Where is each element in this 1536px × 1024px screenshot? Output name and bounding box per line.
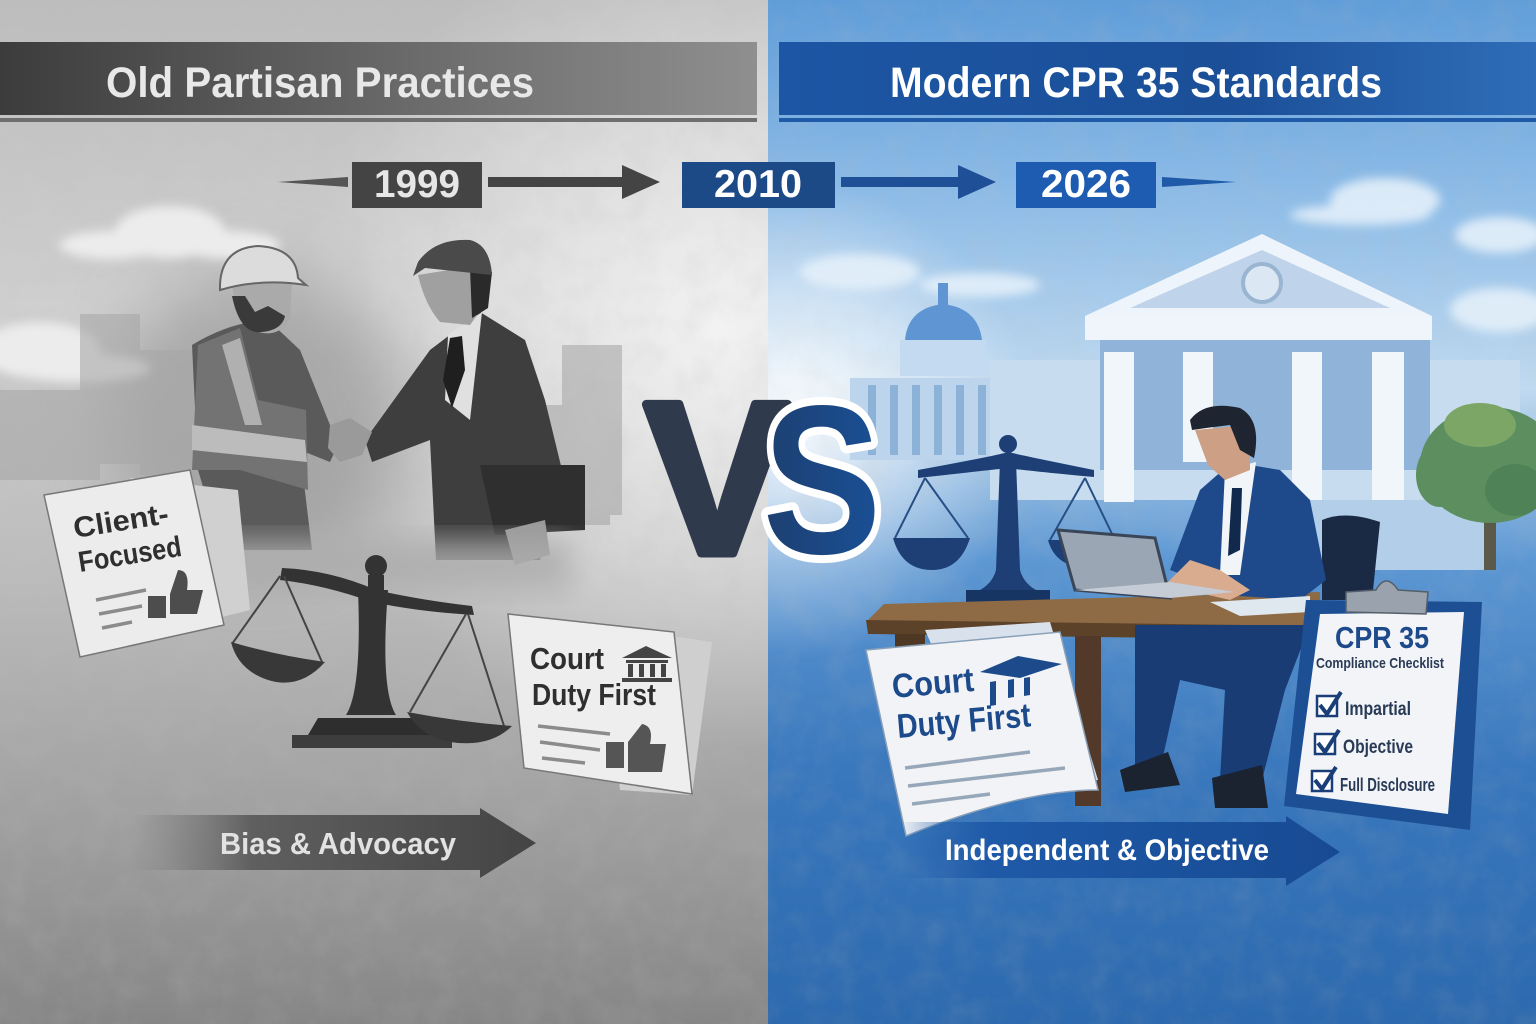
- clipboard: CPR 35 compliance checklist: CPR 35: [1335, 620, 1429, 655]
- tree: [1416, 403, 1536, 570]
- heading banner: modern CPR 35 standards: [779, 42, 1536, 122]
- year 1999: 1999: [374, 163, 460, 206]
- person: [1170, 462, 1326, 600]
- handshake: [328, 418, 372, 462]
- laptop: [1058, 530, 1170, 598]
- document: court duty first (grey): Court: [530, 641, 604, 676]
- timeline: [278, 162, 1236, 208]
- clipboard: CPR 35 compliance checklist: Compliance Checklist: [1316, 655, 1444, 672]
- clipboard: CPR 35 compliance checklist: [1284, 581, 1482, 830]
- clipboard clip: [1346, 581, 1428, 614]
- checklist item: objective: [1315, 730, 1413, 758]
- heading banner: old partisan practices: [0, 42, 757, 122]
- lawyer: [365, 240, 585, 565]
- courthouse: [990, 234, 1520, 570]
- icon: thumbs up: [148, 570, 203, 618]
- checklist item: full disclosure: Full Disclosure: [1340, 775, 1435, 795]
- trousers: [1135, 625, 1310, 780]
- arrow: bias and advocacy: Bias & Advocacy: [220, 826, 457, 861]
- VS emblem: [645, 357, 881, 599]
- timeline trailing arrow: [1162, 177, 1236, 187]
- left background: clouds and city: [0, 206, 622, 570]
- heading banner: old partisan practices: Old Partisan Practices: [106, 59, 534, 107]
- heading banner: modern CPR 35 standards: Modern CPR 35 Standards: [890, 59, 1382, 107]
- document: court duty first (grey): Duty First: [532, 677, 656, 712]
- arrow 2010 to 2026: [841, 165, 996, 199]
- arrow: bias and advocacy: [130, 808, 536, 878]
- year 2010: 2010: [714, 163, 802, 206]
- capitol: [850, 283, 1040, 460]
- engineer: [192, 246, 340, 550]
- document: court duty first (grey): [508, 614, 712, 795]
- icon: courthouse: [622, 646, 672, 682]
- checklist item: objective: Objective: [1343, 737, 1413, 758]
- year 2010: [682, 162, 835, 208]
- letter V: V: [645, 357, 789, 599]
- desk papers: [1210, 596, 1310, 616]
- chair: [1322, 515, 1380, 600]
- timeline lead-in arrow: [278, 177, 348, 187]
- panel: old partisan practices background: [0, 0, 768, 1024]
- illustration: engineer and lawyer handshake: [190, 240, 585, 590]
- icon: thumbs up: [606, 724, 666, 772]
- panel: modern CPR 35 standards background: [768, 0, 1536, 1024]
- arrow: independent and objective: Independent & Objective: [945, 834, 1269, 867]
- checklist item: impartial: [1317, 692, 1411, 720]
- year 2026: 2026: [1041, 163, 1131, 206]
- document: client-focused: Client-: [71, 498, 171, 545]
- shoes: [1120, 752, 1268, 808]
- year 1999: [352, 162, 482, 208]
- document: court duty first (blue): Duty First: [895, 696, 1032, 746]
- illustration: expert working at desk: [866, 406, 1380, 808]
- right background: clouds, capitol, courthouse, tree: [800, 178, 1536, 570]
- document: court duty first (blue): [866, 622, 1098, 836]
- document: client-focused: [44, 470, 250, 657]
- arrow 1999 to 2010: [488, 165, 660, 199]
- icon: balanced scales of justice (blue): [893, 435, 1115, 602]
- year 2026: [1016, 162, 1156, 208]
- icon: tilted scales of justice (grey): [231, 555, 512, 748]
- icon: courthouse: [980, 656, 1062, 706]
- document: client-focused: Focused: [76, 531, 184, 579]
- checklist item: impartial: Impartial: [1345, 699, 1411, 720]
- checklist item: full disclosure: [1312, 767, 1435, 795]
- letter S: S: [763, 362, 881, 598]
- desk: [866, 592, 1320, 628]
- arrow: independent and objective: [900, 816, 1340, 886]
- document: court duty first (blue): Court: [890, 661, 975, 706]
